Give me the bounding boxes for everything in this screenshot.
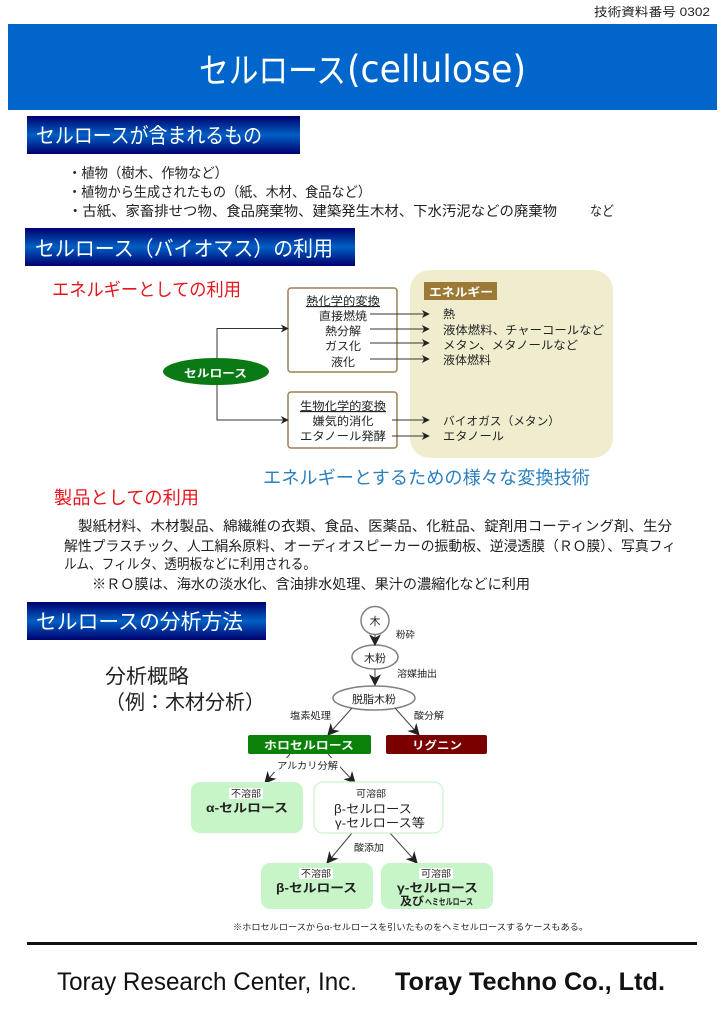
node: lignin bbox=[386, 735, 487, 754]
node: wood powder: 木粉 bbox=[364, 652, 386, 665]
box: alpha cellulose bbox=[191, 782, 303, 833]
box: beta cellulose: β-セルロース bbox=[276, 881, 357, 895]
box: beta cellulose bbox=[261, 863, 373, 909]
box: soluble fraction: β-セルロース bbox=[334, 802, 412, 816]
section heading: contents: セルロースが含まれるもの bbox=[36, 125, 262, 148]
step labels: 塩素処理 bbox=[290, 710, 332, 722]
node: holocellulose: ホロセルロース bbox=[264, 739, 354, 752]
document number: 技術資料番号 0302 bbox=[594, 4, 710, 19]
step labels: 酸添加 bbox=[354, 842, 384, 854]
energy outputs: 液体燃料、チャーコールなど bbox=[443, 323, 605, 337]
box: gamma cellulose and hemicellulose: 及び bbox=[400, 894, 425, 908]
text block: product uses: 製紙材料、木材製品、綿繊維の衣類、食品、医薬品、化粧品、錠剤用コーティング剤、生分 bbox=[78, 518, 672, 534]
title banner: (cellulose) bbox=[347, 48, 526, 91]
footer logo: Toray Techno: Toray Techno Co., Ltd. bbox=[395, 968, 665, 996]
box: thermochemical conversion: 熱化学的変換 bbox=[306, 294, 381, 308]
box: biochemical conversion: 嫌気的消化 bbox=[312, 414, 374, 428]
text block: sources of cellulose bbox=[68, 165, 614, 219]
box: thermochemical conversion bbox=[288, 288, 397, 372]
text block: analysis overview bbox=[105, 665, 265, 714]
title banner bbox=[8, 24, 717, 110]
section heading: analysis bbox=[27, 602, 266, 640]
node: cellulose bbox=[163, 358, 269, 385]
node: lignin: リグニン bbox=[412, 738, 462, 752]
box: alpha cellulose: α-セルロース bbox=[206, 801, 288, 815]
box: soluble fraction: γ-セルロース等 bbox=[335, 816, 425, 830]
box: soluble fraction: 可溶部 bbox=[356, 788, 387, 800]
flow arrows bbox=[265, 635, 419, 863]
text block: product uses: 解性プラスチック、人工絹糸原料、オーディオスピーカーの振動板、逆浸透膜（ＲＯ膜）、写真フィ bbox=[64, 538, 676, 554]
title banner: セルロース bbox=[199, 52, 346, 91]
node: holocellulose bbox=[248, 735, 371, 754]
node: defatted wood powder: 脱脂木粉 bbox=[352, 692, 396, 706]
node: wood powder bbox=[352, 645, 398, 669]
text block: sources of cellulose: など bbox=[590, 203, 614, 219]
box: gamma cellulose and hemicellulose: ヘミセルロース bbox=[425, 897, 473, 907]
energy outputs bbox=[443, 308, 605, 443]
energy outputs: バイオガス（メタン） bbox=[443, 415, 560, 428]
section heading: uses: セルロース（バイオマス）の利用 bbox=[35, 238, 333, 261]
box: thermochemical conversion: 熱分解 bbox=[325, 324, 362, 338]
step labels: 溶媒抽出 bbox=[397, 668, 437, 680]
energy label: エネルギー bbox=[429, 286, 493, 299]
box: thermochemical conversion: 直接燃焼 bbox=[319, 309, 368, 323]
text block: product uses: ルム、フィルタ、透明板などに利用される。 bbox=[64, 556, 316, 572]
energy outputs: エタノール bbox=[443, 430, 504, 443]
step label: alkali decomposition: アルカリ分解 bbox=[277, 760, 339, 772]
text block: sources of cellulose: ・古紙、家畜排せつ物、食品廃棄物、建築発生木材、下水汚泥などの廃棄物 bbox=[68, 203, 557, 219]
step labels: 酸分解 bbox=[414, 710, 445, 722]
box: biochemical conversion: 生物化学的変換 bbox=[300, 399, 387, 413]
text block: sources of cellulose: ・植物から生成されたもの（紙、木材、食品など） bbox=[68, 184, 371, 200]
box: gamma cellulose and hemicellulose bbox=[381, 863, 493, 909]
section heading: uses bbox=[25, 228, 355, 266]
text block: product uses bbox=[64, 518, 676, 592]
output arrows bbox=[370, 314, 429, 436]
box: biochemical conversion: エタノール発酵 bbox=[300, 429, 387, 443]
panel: energy bbox=[410, 270, 613, 458]
box: biochemical conversion bbox=[288, 392, 397, 448]
text block: product uses: ※ＲＯ膜は、海水の淡水化、含油排水処理、果汁の濃縮化などに利用 bbox=[92, 576, 530, 592]
subheading: product use: 製品としての利用 bbox=[54, 488, 199, 508]
node: cellulose: セルロース bbox=[184, 367, 247, 380]
energy label bbox=[424, 282, 497, 300]
diagram caption: エネルギーとするための様々な変換技術 bbox=[263, 468, 590, 488]
node: wood: 木 bbox=[370, 615, 380, 628]
step labels bbox=[290, 629, 445, 854]
text block: analysis overview: 分析概略 bbox=[105, 665, 189, 688]
box: gamma cellulose and hemicellulose: γ-セルロース bbox=[397, 881, 478, 895]
footnote: ※ホロセルロースからα-セルロースを引いたものをヘミセルロースするケースもある。 bbox=[233, 922, 588, 932]
box: soluble fraction bbox=[314, 782, 443, 833]
box: beta cellulose: 不溶部 bbox=[301, 868, 332, 880]
section heading: analysis: セルロースの分析方法 bbox=[36, 611, 243, 634]
subheading: energy use: エネルギーとしての利用 bbox=[52, 280, 241, 300]
text block: sources of cellulose: ・植物（樹木、作物など） bbox=[68, 165, 228, 181]
text block: analysis overview: （例：木材分析） bbox=[105, 691, 265, 714]
analysis flowchart bbox=[191, 606, 493, 909]
section heading: contents bbox=[27, 116, 300, 154]
step labels: 粉砕 bbox=[396, 629, 415, 641]
footer logo: Toray Research Center: Toray Research Center, Inc. bbox=[57, 968, 357, 996]
node: defatted wood powder bbox=[333, 686, 415, 710]
box: thermochemical conversion: ガス化 bbox=[325, 340, 362, 353]
box: alpha cellulose: 不溶部 bbox=[231, 788, 262, 800]
energy outputs: 液体燃料 bbox=[443, 353, 492, 367]
connector arrows from cellulose bbox=[217, 328, 288, 420]
energy outputs: メタン、メタノールなど bbox=[443, 339, 579, 352]
node: wood bbox=[361, 606, 389, 634]
energy conversion diagram bbox=[163, 270, 613, 458]
box: thermochemical conversion: 液化 bbox=[331, 356, 356, 369]
box: gamma cellulose and hemicellulose: 可溶部 bbox=[421, 868, 452, 880]
step label: alkali decomposition bbox=[274, 758, 340, 772]
energy outputs: 熱 bbox=[443, 308, 456, 321]
